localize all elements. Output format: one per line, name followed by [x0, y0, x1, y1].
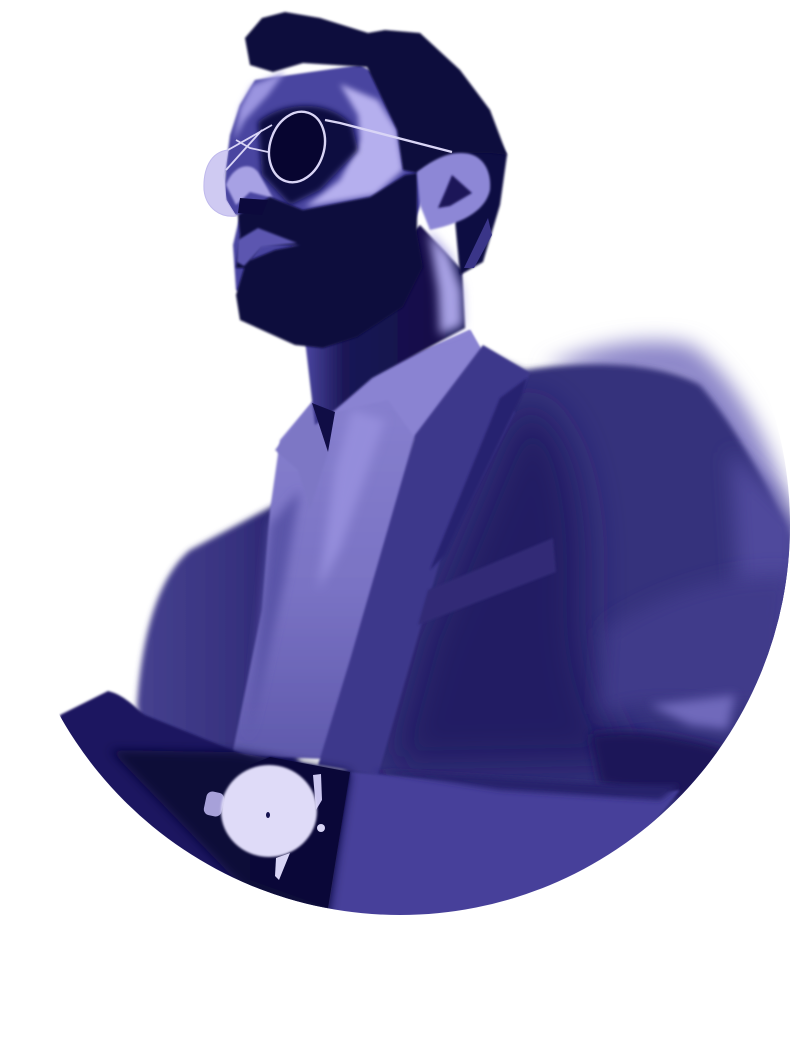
watch lug: [313, 774, 322, 810]
watch stud: [317, 824, 325, 832]
dark left forearm: [60, 691, 350, 920]
cheek highlight: [305, 84, 403, 207]
back hair strands: [464, 218, 492, 268]
left lens: [204, 150, 236, 216]
shirt: [232, 330, 480, 760]
lapel dark edge: [430, 378, 527, 570]
head: [204, 12, 507, 348]
jacket dark torso shading: [385, 400, 640, 770]
nose highlight: [226, 166, 273, 205]
watch hub: [266, 812, 270, 818]
nostril shadow: [238, 198, 268, 215]
jacket lapel: [318, 345, 530, 775]
jacket body: [330, 350, 800, 830]
collar shadow: [312, 403, 335, 452]
forearm sleeve: [325, 772, 680, 920]
ear inner shadow: [438, 175, 472, 208]
back of hair: [430, 110, 507, 275]
watch: [203, 757, 350, 908]
neck highlight: [428, 230, 463, 335]
watch crown: [204, 792, 224, 816]
hair: [245, 12, 507, 173]
temple arm: [325, 120, 452, 152]
shirt placket highlight: [319, 413, 382, 580]
man figure clipped to circle: [60, 225, 800, 920]
shirt collar right: [447, 329, 482, 374]
face base: [224, 65, 430, 320]
shirt collar left: [274, 403, 318, 454]
right lens: [260, 104, 334, 190]
beard: [236, 173, 423, 348]
lips highlight: [237, 228, 297, 266]
shirt fold shadow: [254, 494, 302, 692]
breast pocket: [418, 538, 556, 625]
sleeve highlight: [650, 695, 735, 730]
watch face: [221, 765, 317, 857]
watch strap: [250, 757, 350, 908]
forehead highlight: [234, 72, 285, 140]
right shoulder light fade: [726, 456, 790, 635]
jacket sleeve lower shadow: [590, 732, 745, 800]
forearm darker area: [110, 750, 350, 915]
glasses: [204, 104, 452, 216]
neck: [305, 225, 465, 425]
illustration: duotone portrait of a man in a circular crop: [59, 10, 790, 915]
jacket right highlight: [600, 574, 795, 715]
watch lower lug: [275, 853, 290, 880]
forearm shadow top: [408, 776, 676, 802]
jacket soft shoulder halo: [545, 341, 790, 510]
bridge: [226, 125, 272, 170]
jacket left sleeve: [137, 503, 300, 780]
eye socket shadow: [258, 106, 358, 205]
ear: [417, 153, 490, 230]
